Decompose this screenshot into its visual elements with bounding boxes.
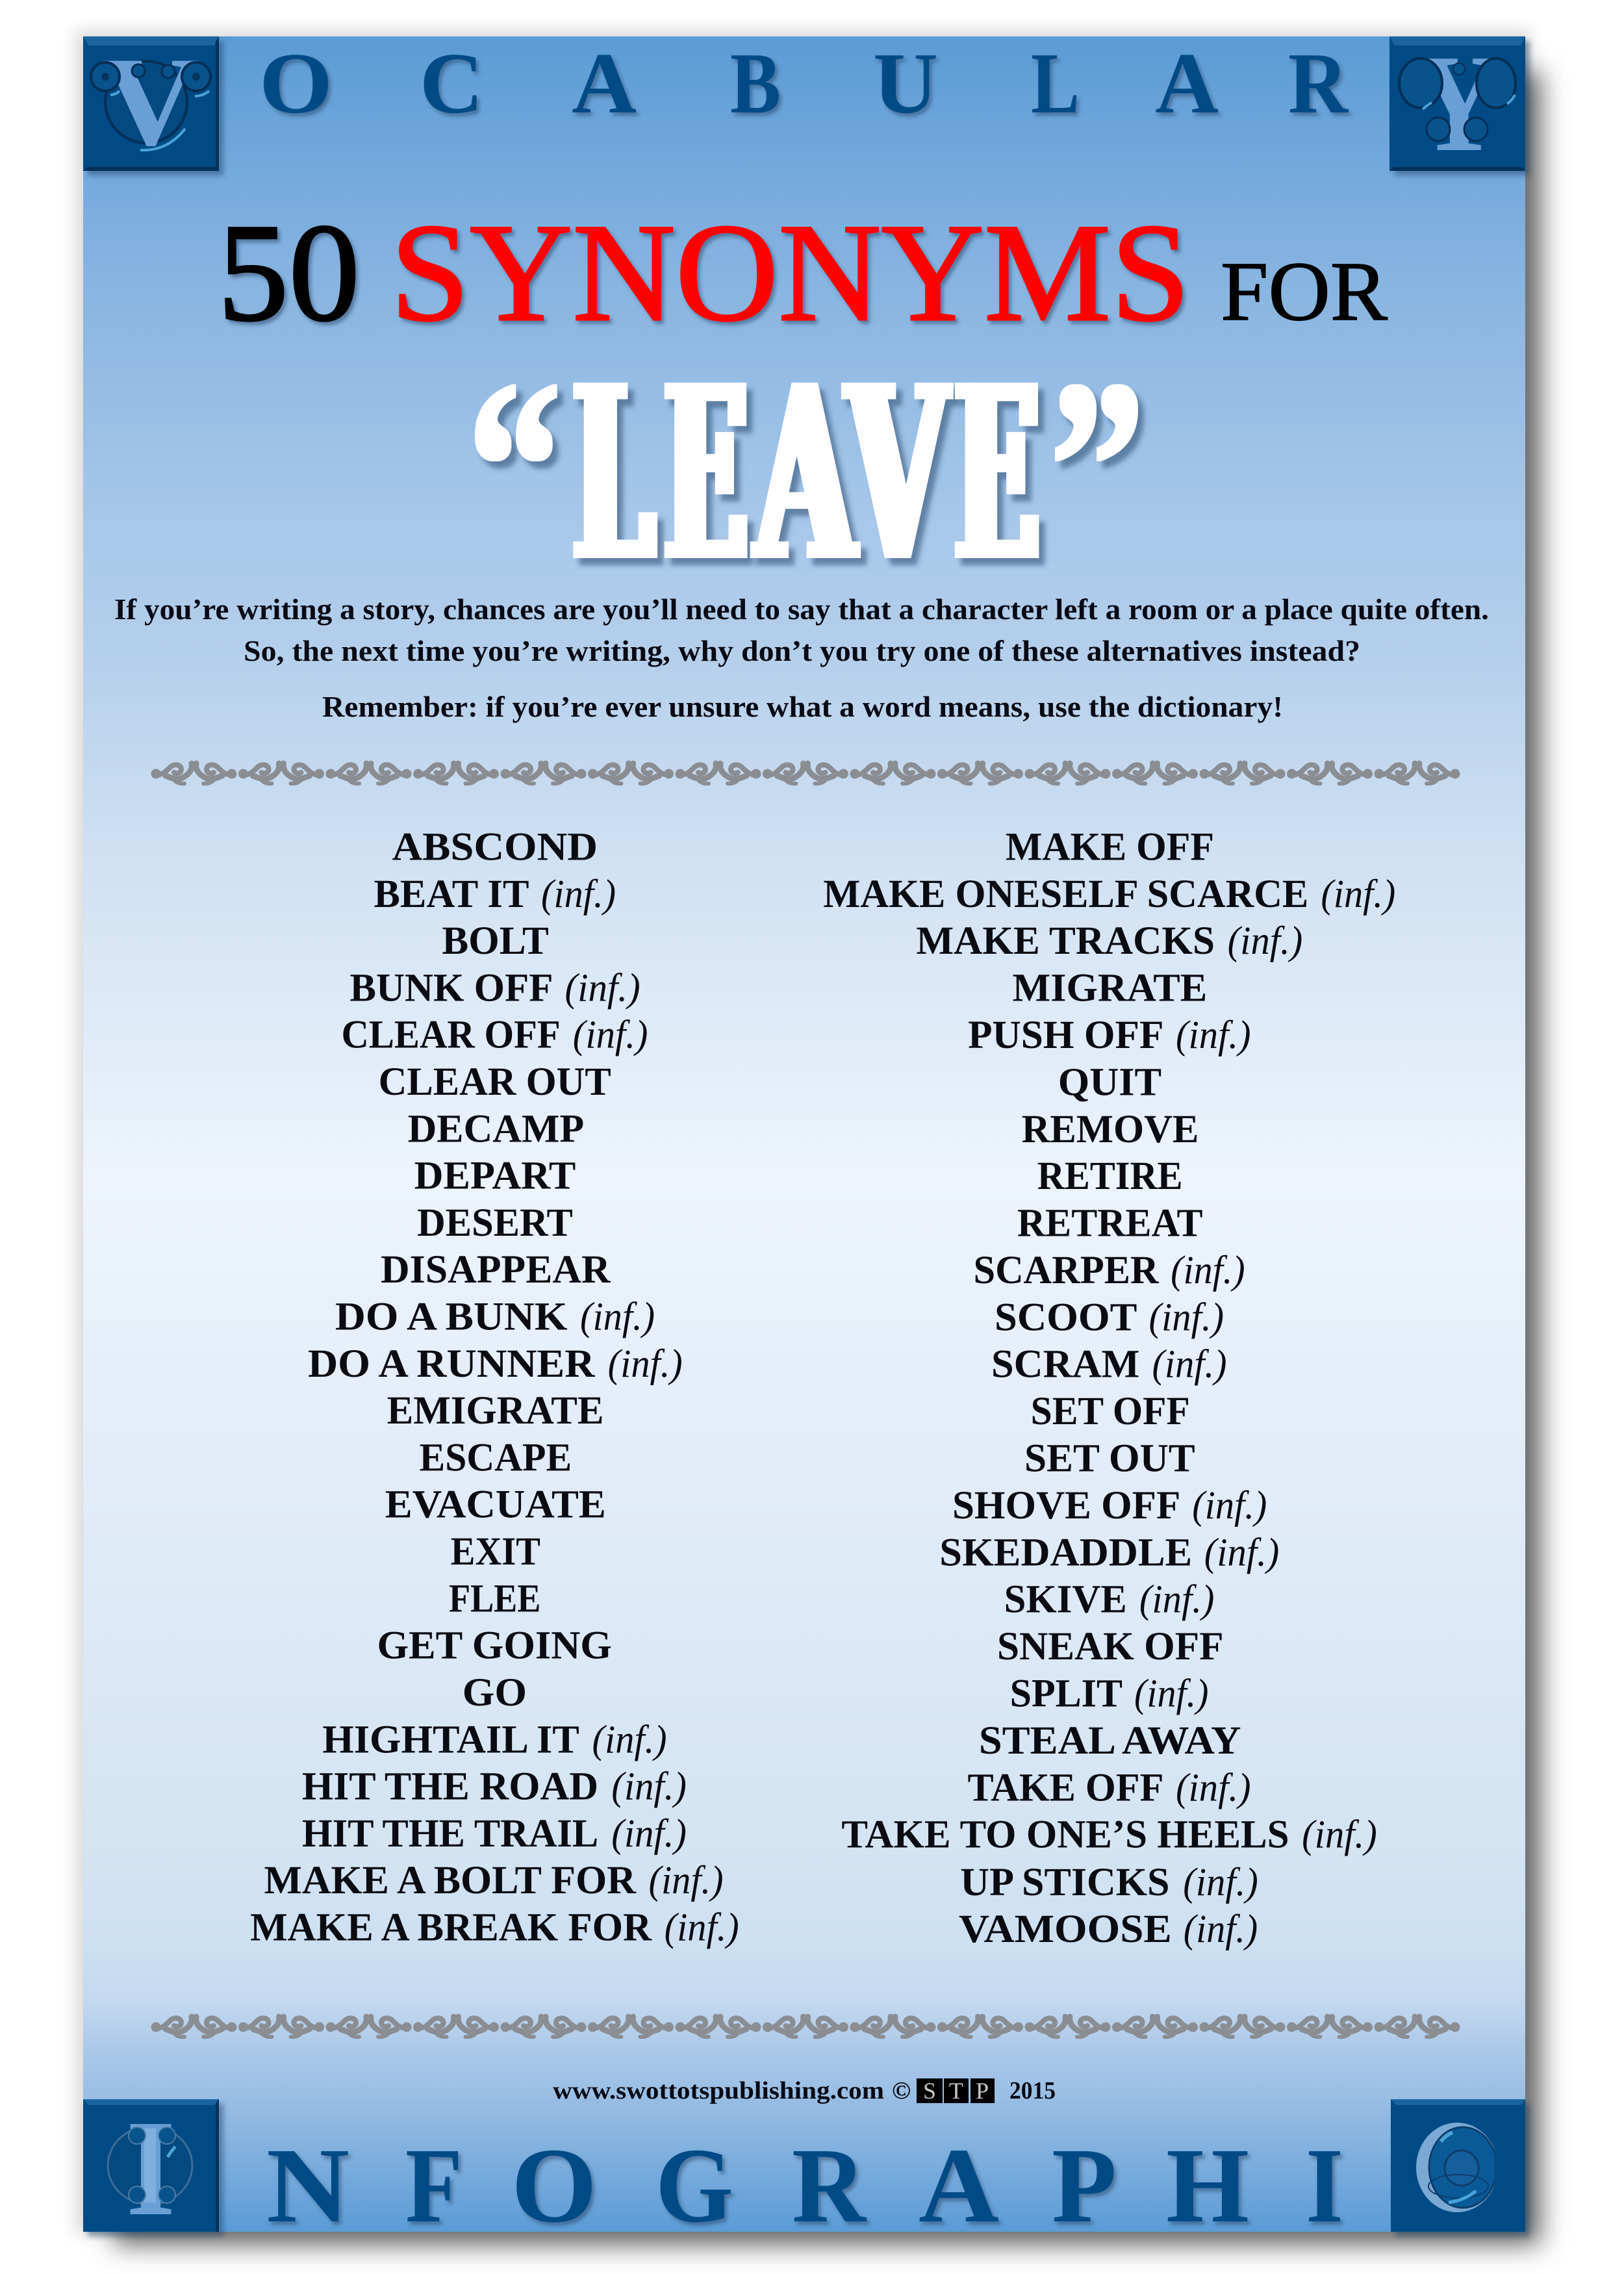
word: BEAT IT	[374, 873, 616, 916]
word: BOLT: BOLT	[442, 919, 549, 963]
word: EMIGRATE: EMIGRATE	[387, 1389, 604, 1433]
word: VAMOOSE: (inf.)	[1184, 1908, 1258, 1951]
word: SKIVE: (inf.)	[1139, 1578, 1214, 1622]
word: BUNK OFF: (inf.)	[565, 966, 641, 1010]
header word: VOCABULARY letters: U	[873, 35, 938, 131]
word: SPLIT: (inf.)	[1134, 1672, 1208, 1716]
word: RETREAT: RETREAT	[1017, 1202, 1203, 1246]
footer word: INFOGRAPHIC letters: O	[511, 2126, 597, 2245]
word: SCOOT	[995, 1296, 1224, 1339]
word: MIGRATE: MIGRATE	[1013, 967, 1207, 1010]
word: GO: GO	[463, 1671, 527, 1715]
word: DISAPPEAR: DISAPPEAR	[381, 1248, 611, 1292]
STP logo: T	[949, 2078, 963, 2104]
word: HIT THE ROAD: (inf.)	[611, 1765, 687, 1809]
word: HIT THE TRAIL: HIT THE TRAIL	[302, 1812, 598, 1856]
word: MAKE A BOLT FOR: MAKE A BOLT FOR	[264, 1859, 637, 1902]
intro text: If you’re writing a story, chances are you’ll need to say that a character left a room or a place quite often.	[114, 593, 1489, 626]
word: DECAMP: DECAMP	[408, 1107, 584, 1151]
footer word: INFOGRAPHIC letters: N	[266, 2126, 349, 2245]
corner tile: Y: Y	[1415, 25, 1502, 181]
word: PUSH OFF: PUSH OFF	[968, 1014, 1163, 1057]
word: DO A RUNNER: (inf.)	[608, 1342, 683, 1386]
word: HIGHTAIL IT: (inf.)	[592, 1718, 667, 1761]
word: DESERT: DESERT	[417, 1201, 573, 1245]
word: MAKE A BOLT FOR: (inf.)	[649, 1859, 724, 1902]
word: SHOVE OFF: (inf.)	[1192, 1484, 1267, 1527]
word: SKEDADDLE: (inf.)	[1204, 1531, 1279, 1574]
corner tile: C	[1391, 2099, 1525, 2232]
word: ABSCOND: ABSCOND	[392, 825, 598, 869]
STP logo: S	[923, 2078, 936, 2104]
word: MAKE OFF: MAKE OFF	[1006, 825, 1214, 869]
word: TAKE TO ONE'S HEELS: (inf.)	[1302, 1813, 1377, 1857]
word: SCARPER: (inf.)	[1171, 1249, 1245, 1292]
word: SKIVE	[1004, 1578, 1214, 1622]
word LEAVE: L	[574, 335, 654, 613]
title: 50 SYNONYMS FOR	[218, 195, 1388, 350]
STP logo	[917, 2078, 995, 2104]
word: MAKE TRACKS: MAKE TRACKS	[916, 919, 1215, 963]
word: SCARPER: SCARPER	[974, 1249, 1160, 1292]
intro text	[114, 593, 1489, 723]
footer credit line	[553, 2077, 1056, 2104]
word: MAKE TRACKS: (inf.)	[1228, 919, 1302, 963]
word list: left column	[250, 825, 739, 1949]
word: REMOVE: REMOVE	[1022, 1108, 1199, 1151]
header word: VOCABULARY letters: A	[1155, 35, 1219, 131]
word: TAKE OFF: (inf.)	[1176, 1766, 1251, 1809]
footer word: INFOGRAPHIC letters: A	[919, 2126, 999, 2245]
number 50: 50	[218, 195, 360, 350]
word: GET GOING: GET GOING	[377, 1624, 612, 1668]
footer credit line: 2015	[1009, 2077, 1056, 2104]
footer word: INFOGRAPHIC letters: F	[405, 2126, 463, 2245]
word: BUNK OFF: BUNK OFF	[349, 966, 553, 1010]
word: VAMOOSE: VAMOOSE	[959, 1908, 1172, 1951]
word: UP STICKS	[960, 1861, 1258, 1904]
word: MAKE ONESELF SCARCE: (inf.)	[1321, 873, 1395, 916]
header word: VOCABULARY letters: C	[420, 35, 483, 131]
word LEAVE	[574, 335, 1039, 613]
footer word: INFOGRAPHIC letters: R	[792, 2126, 867, 2245]
word LEAVE: V	[846, 335, 948, 613]
header word: VOCABULARY letters: B	[730, 35, 781, 131]
corner tile: V	[83, 31, 219, 172]
header word: VOCABULARY letters: A	[572, 35, 637, 131]
word: TAKE TO ONE'S HEELS: TAKE TO ONE’S HEELS	[841, 1813, 1289, 1857]
header word: VOCABULARY letters	[259, 35, 1349, 131]
word: SPLIT: SPLIT	[1010, 1672, 1123, 1716]
word list: right column	[823, 825, 1395, 1951]
corner tile: I	[83, 2091, 219, 2244]
word: RETIRE: RETIRE	[1037, 1155, 1183, 1198]
word: HIGHTAIL IT: HIGHTAIL IT	[322, 1718, 579, 1761]
footer word: INFOGRAPHIC letters: P	[1052, 2126, 1117, 2245]
word LEAVE: E	[665, 335, 747, 613]
word: MAKE ONESELF SCARCE: MAKE ONESELF SCARCE	[823, 873, 1308, 916]
footer word: INFOGRAPHIC letters: H	[1166, 2126, 1249, 2245]
word LEAVE: A	[755, 335, 856, 613]
word: DEPART: DEPART	[414, 1155, 576, 1198]
word FOR: FOR	[1221, 245, 1388, 339]
word: SKIVE: SKIVE	[1004, 1578, 1127, 1622]
word: SCOOT: (inf.)	[1148, 1296, 1224, 1339]
word: HIT THE TRAIL: (inf.)	[611, 1812, 687, 1856]
ornament divider: bottom	[151, 2017, 1460, 2037]
closing quote: ”	[1050, 330, 1145, 604]
word: DO A RUNNER: DO A RUNNER	[308, 1342, 595, 1386]
word: UP STICKS: (inf.)	[1183, 1861, 1258, 1904]
word: STEAL AWAY: STEAL AWAY	[979, 1719, 1241, 1763]
ornament divider: top	[151, 763, 1460, 784]
word: VAMOOSE	[959, 1908, 1258, 1951]
footer credit line: ©	[892, 2077, 911, 2104]
intro text: Remember: if you’re ever unsure what a word means, use the dictionary!	[322, 690, 1283, 723]
word: CLEAR OFF: (inf.)	[573, 1014, 648, 1057]
word: PUSH OFF: (inf.)	[1176, 1014, 1251, 1057]
footer word: INFOGRAPHIC letters: G	[655, 2126, 733, 2245]
word: SCARPER	[974, 1249, 1245, 1292]
word: QUIT: QUIT	[1058, 1060, 1161, 1104]
word: BEAT IT: BEAT IT	[374, 873, 529, 916]
word: SCRAM: (inf.)	[1152, 1343, 1227, 1386]
word: SKEDADDLE: SKEDADDLE	[939, 1531, 1192, 1574]
word: SET OFF: SET OFF	[1031, 1390, 1190, 1433]
footer word: INFOGRAPHIC letters	[266, 2126, 1343, 2245]
word: TAKE OFF: TAKE OFF	[968, 1766, 1163, 1809]
corner tile: V: V	[101, 31, 200, 172]
word: SHOVE OFF: SHOVE OFF	[952, 1484, 1180, 1527]
intro text: So, the next time you’re writing, why don’t you try one of these alternatives instead?	[244, 634, 1360, 667]
STP logo: P	[976, 2078, 989, 2104]
title: LEAVE in quotes	[468, 330, 1145, 613]
word: DO A BUNK: DO A BUNK	[335, 1295, 567, 1339]
header word: VOCABULARY letters: O	[259, 35, 333, 131]
opening quote: “	[468, 330, 561, 604]
word: SET OUT: SET OUT	[1024, 1437, 1195, 1481]
corner tile: I: I	[126, 2091, 175, 2244]
footer word: INFOGRAPHIC letters: I	[1306, 2126, 1343, 2245]
word: CLEAR OFF: CLEAR OFF	[341, 1014, 561, 1057]
word: MAKE A BREAK FOR: (inf.)	[665, 1906, 739, 1949]
word: FLEE: FLEE	[449, 1577, 540, 1620]
word: UP STICKS: UP STICKS	[960, 1861, 1169, 1904]
word: CLEAR OUT: CLEAR OUT	[379, 1060, 611, 1104]
word: SNEAK OFF: SNEAK OFF	[997, 1625, 1223, 1668]
header word: VOCABULARY letters: R	[1288, 35, 1349, 131]
word: SCRAM	[991, 1343, 1227, 1386]
word: SCRAM: SCRAM	[991, 1343, 1139, 1386]
word: EVACUATE: EVACUATE	[385, 1483, 606, 1527]
title: LEAVE in quotes: E	[956, 335, 1039, 613]
word: HIT THE ROAD: HIT THE ROAD	[302, 1765, 598, 1809]
word: SCOOT: SCOOT	[995, 1296, 1137, 1339]
word: MAKE A BREAK FOR: MAKE A BREAK FOR	[250, 1906, 652, 1949]
word SYNONYMS: SYNONYMS	[390, 195, 1190, 350]
footer credit line: www.swottotspublishing.com	[553, 2077, 884, 2104]
word: SPLIT	[1010, 1672, 1208, 1716]
word: DO A BUNK	[335, 1295, 655, 1339]
word: EXIT: EXIT	[451, 1530, 540, 1574]
word: ESCAPE: ESCAPE	[420, 1436, 572, 1479]
header word: VOCABULARY letters: L	[1031, 35, 1080, 131]
word: BEAT IT: (inf.)	[541, 873, 616, 916]
word: DO A BUNK: (inf.)	[580, 1295, 655, 1339]
word: PUSH OFF	[968, 1014, 1251, 1057]
